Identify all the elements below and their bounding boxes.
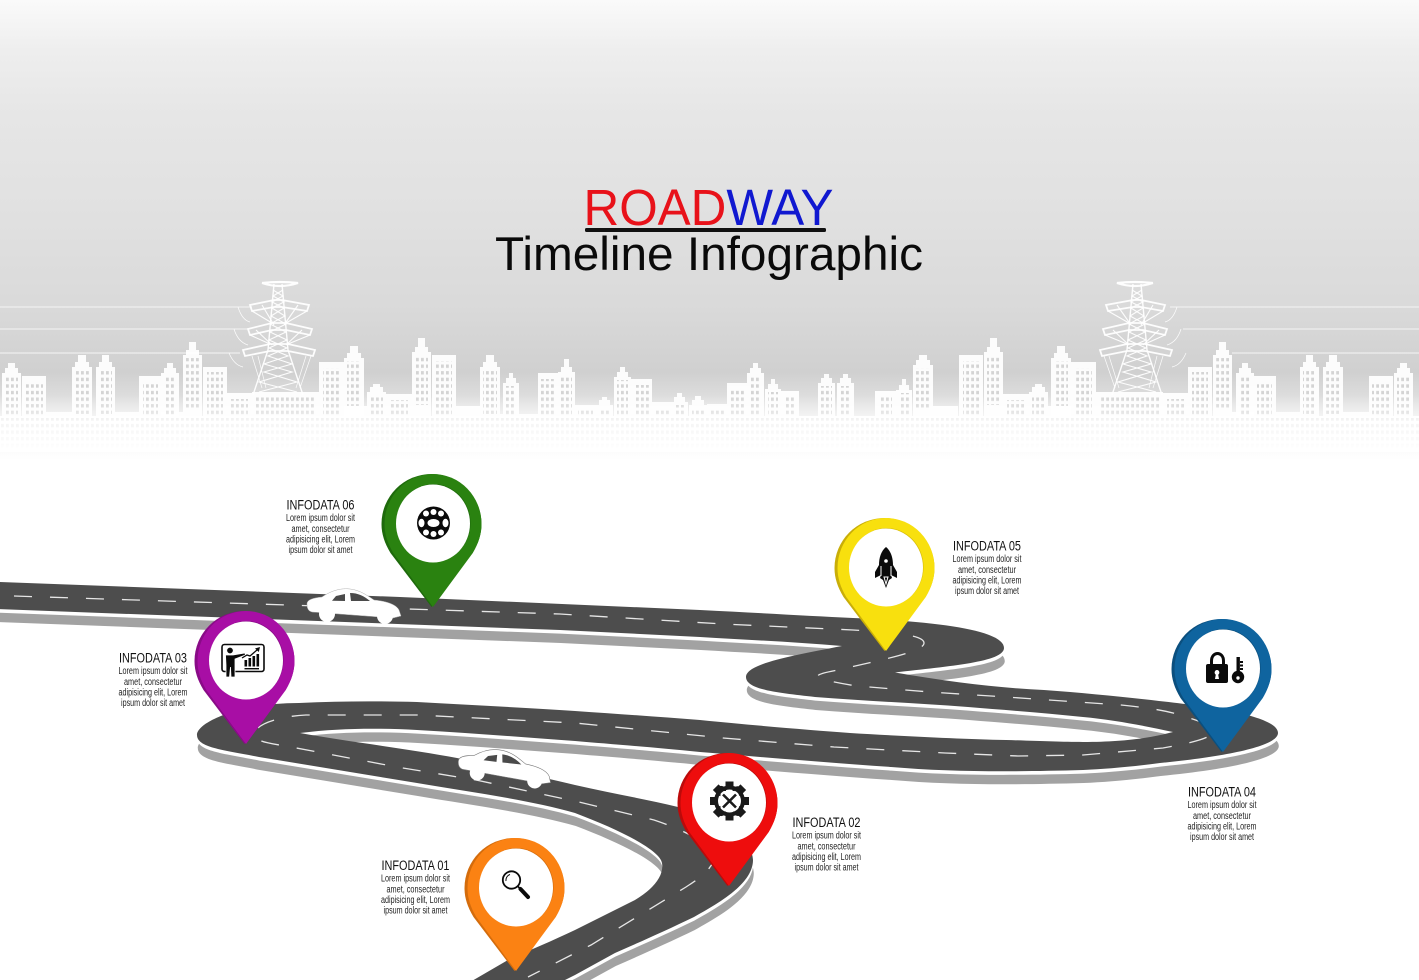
icon: gear and wrench: [710, 782, 749, 820]
city buildings left: [2, 338, 456, 450]
label: INFODATA 02: Lorem ipsum dolor sit: [792, 830, 861, 842]
label: INFODATA 01: amet, consectetur: [386, 884, 445, 896]
label: INFODATA 05: Lorem ipsum dolor sit: [952, 554, 1022, 565]
icon: magnifying glass: [503, 871, 528, 897]
label: INFODATA 04: amet, consectetur: [1193, 811, 1251, 822]
label: INFODATA 06: [286, 498, 355, 556]
label: INFODATA 04: INFODATA 04: [1188, 784, 1256, 800]
label: INFODATA 04: ipsum dolor sit amet: [1190, 832, 1254, 843]
icon: globe: [417, 506, 450, 540]
label: INFODATA 02: amet, consectetur: [798, 842, 856, 852]
road surface: [0, 582, 1278, 980]
background: grey sky gradient: [0, 0, 1419, 460]
label: INFODATA 06: adipisicing elit, Lorem: [286, 534, 355, 546]
label: INFODATA 06: INFODATA 06: [286, 498, 354, 512]
car on upper road: [307, 589, 401, 624]
pin 04: blue with lock and key icon: [1172, 619, 1272, 752]
label: INFODATA 01: INFODATA 01: [382, 858, 450, 873]
title underline: [585, 228, 826, 232]
label: INFODATA 02: [792, 815, 861, 874]
icon: rocket: [875, 547, 897, 588]
label: INFODATA 01: adipisicing elit, Lorem: [381, 895, 450, 906]
label: INFODATA 04: adipisicing elit, Lorem: [1188, 822, 1256, 832]
electricity pylon right: [1100, 282, 1186, 395]
label: INFODATA 04: [1188, 784, 1257, 843]
label: INFODATA 06: amet, consectetur: [292, 524, 350, 535]
skyline: power lines, pylons and city buildings: [0, 282, 1419, 452]
road centre dashes: [14, 596, 1213, 977]
car on lower road: [456, 746, 553, 790]
title: [495, 179, 923, 280]
fade of skyline into white: [0, 395, 1419, 452]
city buildings right: [959, 338, 1413, 450]
label: INFODATA 06: ipsum dolor sit amet: [288, 545, 353, 556]
icon: presenter with chart: [222, 644, 264, 677]
pin 05: yellow with rocket icon: [834, 518, 934, 651]
icon: lock and key: [1206, 654, 1244, 683]
label: INFODATA 01: ipsum dolor sit amet: [384, 906, 448, 916]
label: INFODATA 04: Lorem ipsum dolor sit: [1188, 800, 1257, 811]
label: INFODATA 05: INFODATA 05: [953, 538, 1021, 554]
label: INFODATA 05: amet, consectetur: [958, 565, 1016, 576]
pin 01: orange with magnifier icon: [464, 838, 564, 971]
label: INFODATA 02: INFODATA 02: [792, 815, 860, 830]
label: INFODATA 02: ipsum dolor sit amet: [794, 862, 859, 874]
subtitle: Timeline Infographic: [495, 227, 923, 280]
title word ROADWAY: ROADWAY: [584, 179, 834, 236]
pin 03: purple with presenter chart icon: [194, 611, 294, 744]
label: INFODATA 03: amet, consectetur: [124, 677, 182, 688]
label: INFODATA 03: INFODATA 03: [119, 650, 187, 666]
label: INFODATA 02: adipisicing elit, Lorem: [792, 852, 861, 863]
label: INFODATA 03: adipisicing elit, Lorem: [118, 688, 188, 698]
label: INFODATA 06: Lorem ipsum dolor sit: [286, 513, 355, 524]
label: INFODATA 03: ipsum dolor sit amet: [121, 698, 185, 709]
label: INFODATA 05: adipisicing elit, Lorem: [952, 576, 1022, 586]
label: INFODATA 01: [381, 858, 450, 916]
label: INFODATA 05: ipsum dolor sit amet: [955, 586, 1019, 597]
road kerb side: [0, 595, 1279, 980]
road white edge: [0, 585, 1278, 980]
label: INFODATA 03: [118, 650, 188, 709]
power lines: [0, 307, 1419, 353]
label: INFODATA 05: [952, 538, 1022, 597]
electricity pylon left: [229, 282, 315, 395]
street-level windows: [0, 416, 1419, 450]
pin 02: red with gear and wrench icon: [678, 753, 778, 886]
label: INFODATA 03: Lorem ipsum dolor sit: [118, 666, 188, 677]
city buildings centre: [456, 355, 958, 450]
winding road: [0, 582, 1279, 980]
pin 06: green with globe icon: [382, 474, 482, 607]
label: INFODATA 01: Lorem ipsum dolor sit: [381, 874, 450, 884]
